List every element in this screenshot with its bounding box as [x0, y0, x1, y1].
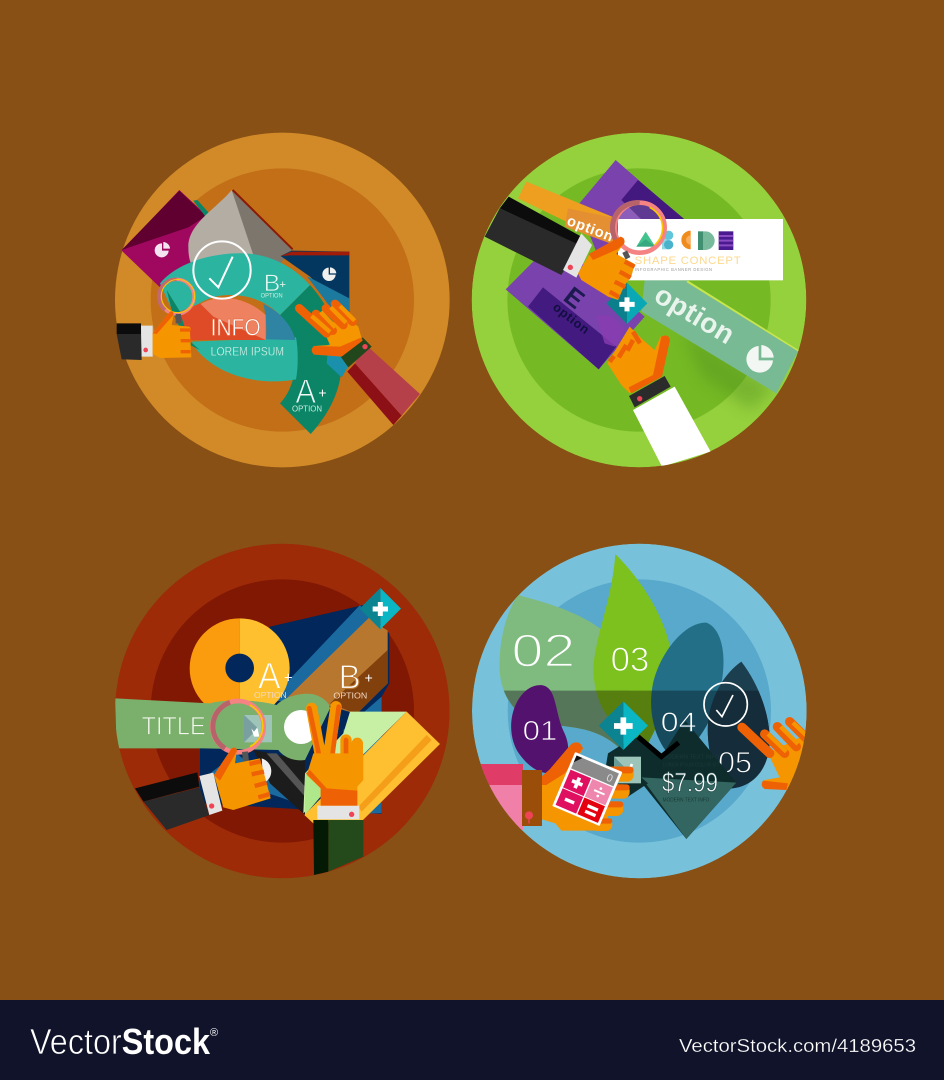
green option banner — [641, 279, 799, 393]
purple card top — [579, 160, 684, 255]
price diamond: LOREM IPSUM DOLOR SIT — [663, 763, 720, 769]
shadow under banner — [688, 342, 772, 410]
label A+ — [292, 373, 327, 413]
labels A+ B+: OPTION — [254, 690, 287, 700]
magnifier — [159, 279, 195, 323]
label B+ — [261, 270, 286, 300]
price diamond — [605, 720, 736, 839]
navy pie card — [281, 251, 349, 323]
dark lower overlay — [504, 690, 770, 788]
leaf numbers: 05 — [718, 747, 752, 780]
info banner — [167, 290, 266, 350]
orange banner — [518, 182, 616, 246]
label B+: OPTION — [261, 293, 283, 300]
labels A+ B+ — [254, 664, 372, 698]
navy and brown arrow card — [200, 605, 389, 814]
leaf 04 — [651, 623, 723, 760]
teal leaf bottom — [192, 337, 298, 381]
footer bar — [0, 1000, 944, 1080]
info banner: INFO — [211, 315, 261, 342]
hand with sleeve left — [485, 197, 635, 300]
black strip — [253, 750, 305, 815]
price diamond: $7.99 — [662, 768, 718, 798]
leaf numbers: 01 — [523, 715, 557, 746]
leaf 05 — [708, 662, 770, 788]
labels A+ B+: + — [365, 670, 373, 686]
plus diamond — [360, 588, 401, 629]
purple card bottom — [506, 261, 645, 370]
green option banner: option — [649, 279, 740, 350]
blue swoosh fragment — [263, 304, 295, 340]
labels A+ B+: A — [258, 654, 281, 696]
price diamond: MODERN TEXT INFO — [663, 797, 710, 803]
check badge — [193, 241, 251, 299]
check badge — [704, 683, 747, 726]
registered mark: ® — [210, 1027, 218, 1039]
panel: orange circle with info shapes — [115, 133, 450, 467]
leaf numbers: 03 — [611, 641, 649, 679]
panel: blue circle with numbered leaves — [472, 544, 813, 878]
yellow disc — [190, 618, 290, 704]
orange banner: option — [565, 213, 616, 246]
leaf numbers — [514, 634, 750, 772]
chevron — [638, 737, 679, 757]
plus diamond — [606, 283, 647, 324]
pointing hand right — [742, 722, 813, 793]
pink sleeve — [478, 764, 542, 830]
white title banner — [618, 219, 783, 280]
magnifier — [212, 701, 264, 762]
hand with calculator — [542, 742, 634, 831]
purple card bottom: E — [558, 280, 590, 315]
leaf 02 — [500, 595, 618, 747]
calculator: 0 — [604, 772, 615, 785]
hand with magnifier left — [117, 311, 191, 360]
labels A+ B+: B — [339, 659, 361, 697]
logo wordmark: VectorStock — [30, 1021, 211, 1062]
label A+: + — [318, 385, 327, 401]
label 04: 04 — [661, 706, 697, 737]
pointing hand right — [299, 304, 420, 425]
price diamond: MODERN TEXT INFO — [663, 754, 720, 760]
labels A+ B+: OPTION — [333, 691, 367, 701]
panel: red circle with title banner — [115, 544, 450, 878]
hand from below — [607, 327, 711, 467]
label A+: A — [295, 373, 316, 411]
green swoosh A+ — [280, 285, 350, 434]
magnifier — [612, 203, 665, 258]
white title banner: INFOGRAPHIC BANNER DESIGN — [635, 267, 712, 272]
peace hand — [306, 707, 363, 875]
white title banner: SHAPE CONCEPT — [635, 255, 741, 267]
green title banner — [115, 694, 330, 760]
plus diamond — [599, 701, 648, 750]
labels A+ B+: + — [284, 671, 293, 687]
yellow block — [303, 712, 440, 823]
small photo tile — [614, 757, 641, 783]
leaf 03 — [593, 554, 672, 743]
green title banner: TITLE — [142, 712, 206, 740]
label B+: B — [264, 270, 280, 297]
grey pyramid card — [188, 190, 293, 265]
label B+: + — [279, 279, 286, 291]
leaf numbers: 02 — [511, 625, 575, 677]
fist hand left — [135, 748, 271, 830]
purple card bottom: option — [550, 300, 592, 337]
teal leaf top — [160, 253, 310, 323]
image id: VectorStock.com/4189653 — [679, 1035, 916, 1056]
lorem ipsum label: LOREM IPSUM — [211, 345, 284, 359]
panel: green circle with option banners — [472, 133, 806, 467]
label A+: OPTION — [292, 403, 322, 413]
calculator — [552, 752, 622, 826]
magenta pie card — [122, 190, 237, 303]
leaf 01 — [511, 685, 568, 773]
